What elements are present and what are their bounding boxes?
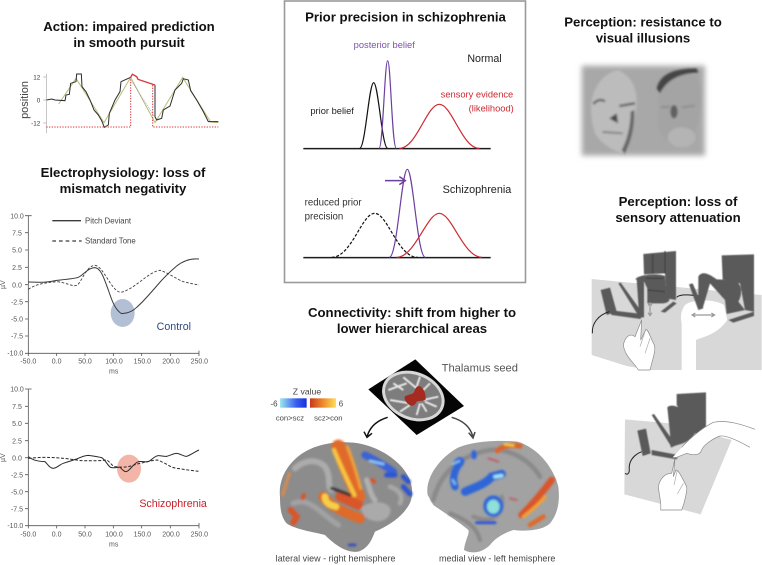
chart: smooth pursuit position trace: [19, 74, 218, 133]
heading: loss of sensory attenuation: sensory attenuation: [615, 210, 741, 225]
chart: schizophrenia mismatch negativity: -10.0: [7, 523, 23, 530]
chart: schizophrenia belief curves: Schizophrenia: [443, 184, 512, 196]
chart: control mismatch negativity: 0.0: [12, 282, 22, 289]
chart: control mismatch negativity: -10.0: [7, 351, 23, 358]
chart: smooth pursuit position trace: -12: [31, 120, 41, 127]
hand: top hand: [673, 421, 755, 457]
chart: normal belief curves: prior belief: [310, 106, 354, 116]
chart: control mismatch negativity: -5.0: [11, 317, 23, 324]
legend: z value colour scale: con>scz: [276, 413, 304, 422]
chart: control mismatch negativity: 5.0: [12, 248, 22, 255]
chart: schizophrenia belief curves: [303, 169, 512, 258]
arrow: posterior shift: [385, 177, 405, 185]
hand: left finger: [623, 320, 655, 370]
chart: normal belief curves: sensory evidence: [441, 89, 513, 99]
chart: schizophrenia belief curves: precision: [305, 212, 343, 223]
device: left robot: [601, 251, 677, 319]
arrow: to lateral view: [364, 417, 388, 437]
image: hollow face illusion: [582, 66, 705, 156]
chart: schizophrenia mismatch negativity: ms: [109, 541, 119, 548]
chart: schizophrenia mismatch negativity: 5.0: [12, 421, 22, 428]
chart: control mismatch negativity: -2.5: [11, 299, 23, 306]
chart: normal belief curves: Normal: [467, 53, 502, 65]
chart: schizophrenia mismatch negativity: 150.0: [134, 531, 151, 538]
chart: control mismatch negativity: [0, 213, 208, 376]
marker: schizophrenia highlight: [117, 455, 141, 483]
illustration: self-produced touch: [624, 392, 755, 514]
chart: smooth pursuit position trace: position: [19, 81, 31, 119]
chart: schizophrenia mismatch negativity: -7.5: [11, 506, 23, 513]
chart: schizophrenia mismatch negativity: -5.0: [11, 489, 23, 496]
chart: control mismatch negativity: Control: [157, 321, 191, 333]
chart: smooth pursuit position trace: 0: [37, 97, 41, 104]
device: robot: [637, 392, 706, 459]
legend: z value colour scale: -6: [270, 400, 278, 409]
chart: control mismatch negativity: 200.0: [162, 358, 180, 365]
chart: schizophrenia mismatch negativity: µV: [0, 453, 7, 462]
panel: prior precision in schizophrenia: [284, 1, 526, 282]
chart: schizophrenia mismatch negativity: 2.5: [12, 438, 22, 445]
chart: control mismatch negativity: -7.5: [11, 334, 23, 341]
brain: medial view left hemisphere: [427, 441, 559, 552]
chart: normal belief curves: (likelihood): [469, 103, 514, 113]
marker: control highlight: [111, 299, 135, 327]
chart: control mismatch negativity: Standard Tone: [85, 237, 136, 246]
caption: medial view: medial view - left hemisphere: [439, 554, 555, 564]
chart: control mismatch negativity: 0.0: [52, 358, 62, 365]
heading: resistance to visual illusions: visual illusions: [596, 30, 690, 46]
arrow: vertical motion: [648, 303, 652, 316]
figure: thalamus connectivity: [270, 359, 559, 564]
device: right robot: [689, 254, 754, 323]
chart: schizophrenia mismatch negativity: -2.5: [11, 472, 23, 479]
chart: control mismatch negativity: 2.5: [12, 265, 22, 272]
chart: schizophrenia belief curves: reduced prior: [305, 198, 362, 209]
caption: lateral view: lateral view - right hemisphere: [276, 554, 396, 564]
chart: schizophrenia mismatch negativity: 7.5: [12, 404, 22, 411]
chart: smooth pursuit position trace: 12: [33, 74, 41, 81]
icon: thalamus seed brain slice: [368, 359, 464, 435]
chart: control mismatch negativity: 250.0: [191, 358, 208, 365]
chart: schizophrenia mismatch negativity: 10.0: [10, 387, 24, 394]
chart: control mismatch negativity: 10.0: [10, 213, 24, 220]
chart: control mismatch negativity: 150.0: [134, 358, 151, 365]
chart: schizophrenia mismatch negativity: 200.0: [162, 531, 180, 538]
label: thalamus seed: Thalamus seed: [442, 363, 518, 375]
chart: control mismatch negativity: 100.0: [105, 358, 123, 365]
arrow: to medial view: [452, 417, 475, 438]
heading: connectivity: lower hierarchical areas: [337, 321, 487, 336]
legend: z value colour scale: Z value: [293, 387, 321, 397]
heading: resistance to visual illusions: Perception: resistance to: [564, 14, 722, 30]
chart: schizophrenia mismatch negativity: 50.0: [78, 531, 92, 538]
legend: z value colour scale: 6: [339, 400, 344, 409]
chart: schizophrenia mismatch negativity: 100.0: [105, 531, 123, 538]
heading: action: in smooth pursuit: [73, 35, 185, 50]
heading: loss of sensory attenuation: Perception: loss of: [619, 194, 738, 209]
chart: control mismatch negativity: Pitch Deviant: [85, 217, 132, 226]
chart: control mismatch negativity: 50.0: [78, 358, 92, 365]
legend: z value colour scale: [270, 387, 344, 422]
chart: schizophrenia mismatch negativity: -50.0: [20, 531, 36, 538]
heading: electrophysiology: Electrophysiology: loss of: [41, 165, 206, 180]
chart: schizophrenia mismatch negativity: 0.0: [12, 455, 22, 462]
chart: control mismatch negativity: -50.0: [20, 358, 36, 365]
chart: control mismatch negativity: µV: [0, 280, 7, 289]
chart: schizophrenia mismatch negativity: 0.0: [52, 531, 62, 538]
heading: electrophysiology: mismatch negativity: [60, 181, 187, 196]
chart: schizophrenia mismatch negativity: [0, 387, 208, 548]
chart: normal belief curves: posterior belief: [354, 40, 415, 50]
legend: z value colour scale: scz>con: [314, 413, 342, 422]
chart: normal belief curves: [303, 40, 514, 149]
heading: prior precision: Prior precision in schizophrenia: [305, 10, 507, 24]
chart: control mismatch negativity: 7.5: [12, 230, 22, 237]
chart: schizophrenia mismatch negativity: 250.0: [191, 531, 208, 538]
heading: connectivity: Connectivity: shift from higher to: [308, 305, 516, 320]
arrow: horizontal motion: [692, 313, 715, 317]
heading: action: Action: impaired prediction: [43, 19, 215, 34]
brain: lateral view right hemisphere: [280, 442, 412, 552]
chart: schizophrenia mismatch negativity: Schizophrenia: [139, 498, 207, 510]
illustration: sensory attenuation with two hands: [592, 251, 762, 370]
chart: control mismatch negativity: ms: [109, 369, 119, 376]
hand: bottom finger: [658, 458, 687, 510]
